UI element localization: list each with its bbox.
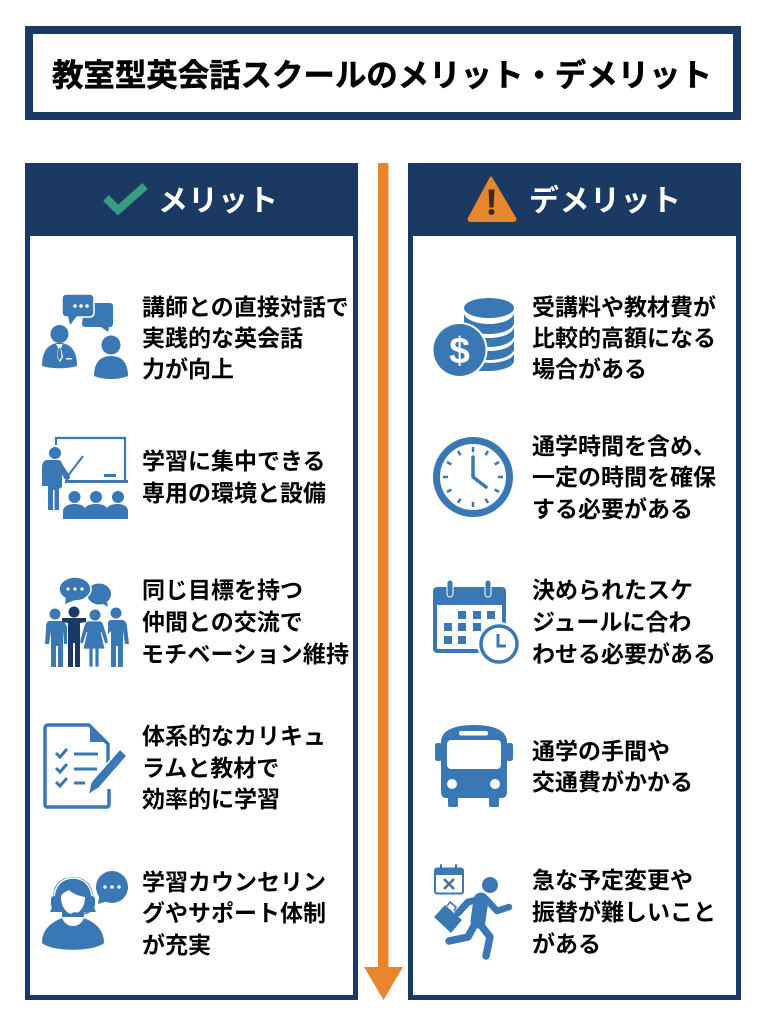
text: merit 2: 学習に集中できる [142,448,326,474]
text: merit 4: ラムと教材で [142,755,279,781]
icon: coins and dollar [432,298,514,378]
text: merit 3: 同じ目標を持つ [142,577,303,603]
text: demerit 5: がある [532,931,601,957]
icon: teacher and classroom [42,438,128,519]
text: merit 4: 効率的に学習 [142,786,280,812]
text: merit 2 [142,448,326,506]
icon: conversation [42,294,128,379]
title text: 教室型英会話スクールのメリット・デメリット [52,57,712,93]
panel: merits [25,163,358,998]
text: merit 1: 力が向上 [142,356,234,382]
text: merit 3: 仲間との交流で [142,609,303,635]
merits heading: メリット [158,185,278,218]
text: merit 4: 体系的なカリキュ [142,723,326,749]
icon: warning triangle [469,178,515,221]
text: merit 3: モチベーション維持 [141,641,349,667]
demerits header [408,163,741,236]
text: merit 1: 実践的な英会話 [142,325,303,351]
center orange arrow [364,163,403,1000]
text: demerit 4 [532,738,693,795]
text: demerit 3: わせる必要がある [532,641,716,667]
text: demerit 1: 場合がある [532,356,647,382]
text: demerit 5 [532,867,716,957]
text: demerit 3: ジュールに合わ [532,609,691,635]
merits header [25,163,358,236]
text: demerit 4: 交通費がかかる [532,769,693,795]
text: demerit 3 [532,577,716,667]
icon: running with briefcase and cancelled calendar [434,865,509,956]
text: demerit 1: 比較的高額になる [532,325,716,351]
text: demerit 1: 受講料や教材費が [532,294,716,320]
icon: group of peers [45,577,129,667]
icon: clock [436,440,510,514]
text: demerit 2: 通学時間を含め、 [532,433,716,459]
icon: support operator [42,871,128,950]
text: merit 5: グやサポート体制 [142,900,326,926]
icon: calendar with clock [433,580,521,666]
icon: bus [435,725,513,807]
text: demerit 2: する必要がある [532,496,693,522]
icon: coins and dollar: $ [449,330,470,371]
text: demerit 2 [532,433,716,522]
text: merit 2: 専用の環境と設備 [142,480,326,506]
icon: checklist and pencil [45,725,127,807]
title box [29,30,737,116]
panel: demerits [408,163,741,998]
demerits heading: デメリット [529,184,681,218]
text: demerit 5: 振替が難しいこと [532,899,716,925]
text: merit 1: 講師との直接対話で [142,294,349,320]
text: merit 5 [142,869,326,958]
icon: check mark [106,186,145,210]
text: merit 3 [141,577,349,667]
text: merit 1 [142,294,349,382]
text: demerit 4: 通学の手間や [532,738,670,764]
text: demerit 2: 一定の時間を確保 [532,464,716,490]
text: merit 4 [142,723,326,812]
text: merit 5: 学習カウンセリン [142,869,326,895]
text: demerit 1 [532,294,716,382]
text: merit 5: が充実 [142,932,211,958]
text: demerit 5: 急な予定変更や [532,867,693,893]
text: demerit 3: 決められたスケ [532,577,693,603]
